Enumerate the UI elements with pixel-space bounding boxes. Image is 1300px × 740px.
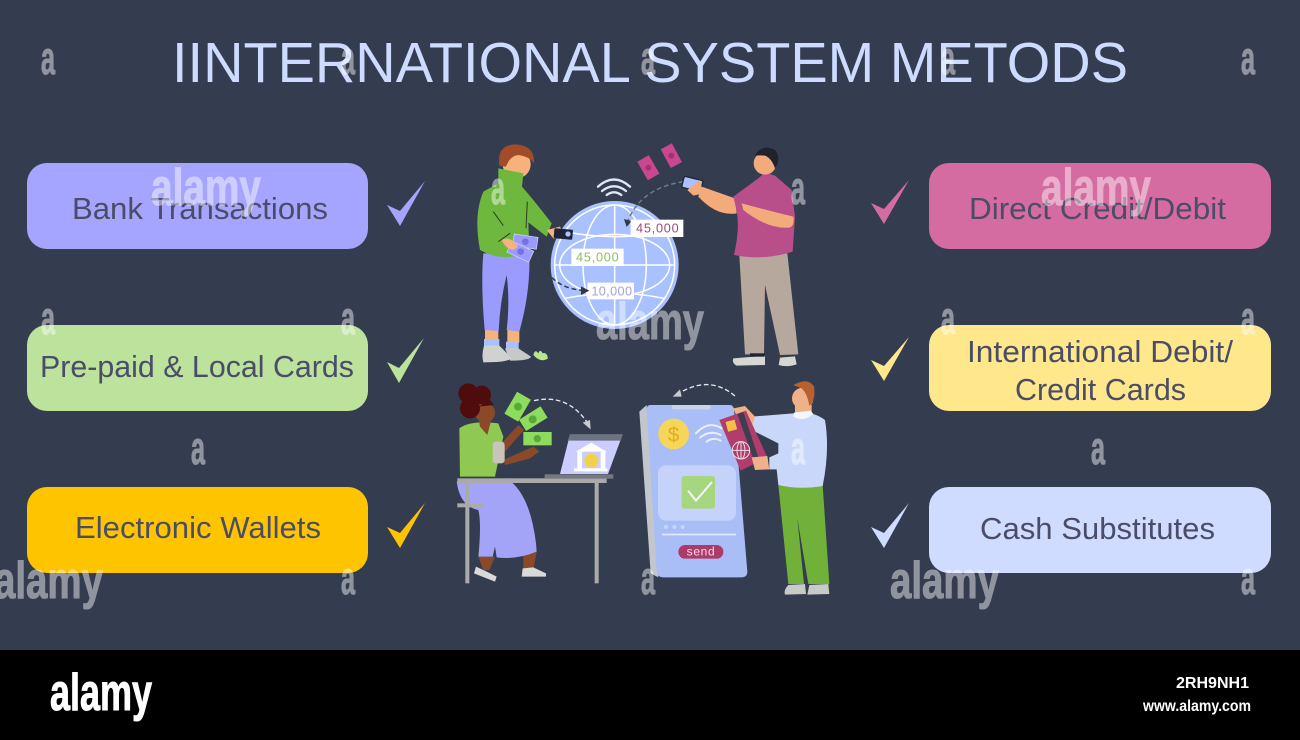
panel: bank transactions: Bank Transactions (72, 191, 328, 226)
label: 45,000 pink (631, 220, 683, 237)
watermark: alamy letters: a (41, 32, 55, 84)
watermark: alamy letters: a (1241, 292, 1255, 344)
watermark: alamy letters: a (941, 32, 955, 84)
panel: international debit credit cards: International Debit/ (967, 334, 1233, 369)
watermark: alamy letters (0, 32, 1255, 610)
arrow: money to laptop (534, 399, 587, 422)
figure: man with bank card (733, 381, 829, 595)
label: 45,000 pink: 45,000 (636, 222, 679, 236)
icon: check international cards (871, 337, 909, 381)
arrow: money to globe (539, 250, 582, 290)
arrow: phone to globe (627, 182, 683, 222)
title: IINTERNATIONAL SYSTEM METODS (172, 31, 1128, 95)
watermark: alamy letters: a (341, 552, 355, 604)
arrow: card to phone (680, 385, 735, 396)
panel: direct credit debit: Direct Credit/Debit (969, 191, 1226, 226)
watermark: alamy letters: a (641, 552, 655, 604)
panel: prepaid and local cards (27, 325, 368, 411)
icon: laptop with bank (545, 434, 623, 479)
label: 10,000 purple: 10,000 (591, 285, 632, 299)
icon: check direct credit debit (871, 180, 909, 224)
icon: gold coin: $ (668, 423, 680, 446)
icon: bank card (719, 411, 767, 471)
panel: electronic wallets: Electronic Wallets (75, 510, 321, 545)
panel: prepaid and local cards: Pre-paid & Local Cards (40, 349, 354, 384)
footer: website: www.alamy.com (1142, 698, 1251, 715)
figure: woman at desk (457, 383, 546, 582)
panel: bank transactions (27, 163, 368, 249)
watermark: alamy letters: alamy (1041, 159, 1151, 217)
watermark: alamy letters: a (641, 32, 655, 84)
watermark: alamy letters: alamy (151, 159, 261, 217)
desk (457, 478, 607, 583)
footer: alamy logo: alamy (50, 664, 152, 722)
icon: confirmation check (682, 476, 715, 509)
watermark: alamy letters: a (1091, 422, 1105, 474)
icon: check electronic wallets (387, 503, 425, 548)
panel: electronic wallets (27, 487, 368, 573)
icon: gold coin (658, 419, 689, 449)
watermark: alamy letters: a (341, 32, 355, 84)
watermark: alamy letters: a (341, 292, 355, 344)
watermark: alamy letters: a (491, 162, 505, 214)
watermark: alamy letters: a (791, 162, 805, 214)
illustration: desk payment and phone card payment (457, 381, 829, 595)
icon: pink banknotes (637, 143, 682, 180)
watermark: alamy letters: a (1241, 32, 1255, 84)
figure: woman in green sweater (477, 144, 573, 362)
icon: green banknotes (504, 392, 552, 445)
watermark: alamy letters: a (791, 422, 805, 474)
watermark: alamy letters: a (41, 292, 55, 344)
watermark: alamy letters: alamy (890, 552, 999, 610)
icon: check prepaid cards (387, 338, 424, 383)
footer bar (0, 650, 1300, 740)
watermark: alamy letters: a (941, 292, 955, 344)
panel: international debit credit cards (929, 325, 1271, 411)
label: 45,000 green: 45,000 (576, 251, 619, 265)
icon: smartphone with send button (639, 405, 747, 577)
figure: man in pink shirt (682, 148, 798, 366)
panel: direct credit debit (929, 163, 1271, 249)
watermark: alamy letters: a (1241, 552, 1255, 604)
icon: phone wifi (696, 425, 722, 442)
illustration: people exchanging money around a globe (477, 143, 798, 366)
icon: globe (551, 201, 679, 329)
panel: international debit credit cards: Credit Cards (1015, 372, 1186, 407)
footer: image id: 2RH9NH1 (1176, 675, 1249, 692)
label: 45,000 green (571, 249, 624, 266)
icon: check bank transactions (387, 181, 425, 226)
icon: wifi signal (598, 179, 630, 195)
icon: check cash substitutes (871, 503, 909, 548)
panel: cash substitutes: Cash Substitutes (980, 511, 1215, 546)
button: send (678, 544, 723, 559)
watermark: alamy letters: a (191, 422, 205, 474)
watermark: alamy letters: alamy (596, 293, 704, 351)
panel: cash substitutes (929, 487, 1271, 573)
button: send: send (687, 544, 715, 558)
